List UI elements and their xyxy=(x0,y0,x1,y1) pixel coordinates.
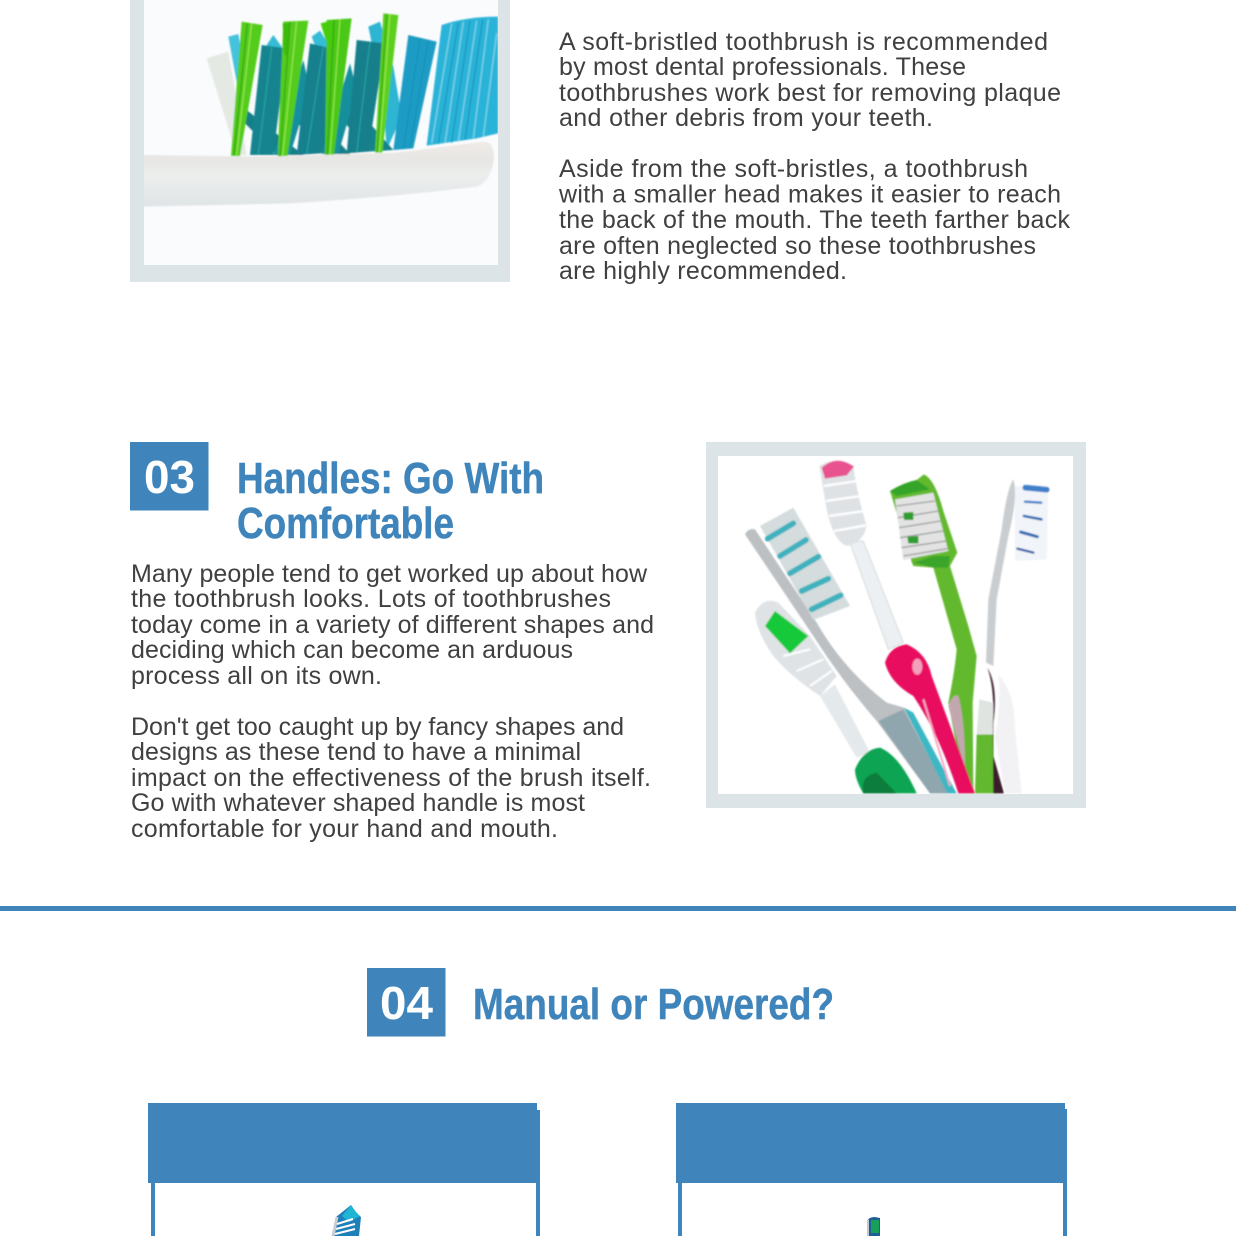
text block: soft bristles and small head: and other debris from your teeth. xyxy=(559,104,933,132)
panel: soft-bristle photo xyxy=(130,0,510,282)
photo frame xyxy=(130,0,510,282)
text block: handles advice: Go with whatever shaped handle is most xyxy=(131,789,585,817)
text block: handles advice: comfortable for your hand and mouth. xyxy=(131,815,558,843)
section divider xyxy=(0,906,1236,911)
photo: toothbrush bristles close-up xyxy=(140,0,498,265)
text block: handles advice: process all on its own. xyxy=(131,662,382,690)
heading: Manual or Powered?: Manual or Powered? xyxy=(473,980,834,1029)
text block: soft bristles and small head: with a smaller head makes it easier to reach xyxy=(558,180,1061,208)
panel: toothbrushes in a cup photo xyxy=(706,442,1086,808)
text block: handles advice: deciding which can become an arduous xyxy=(131,636,573,664)
card header band xyxy=(676,1103,1067,1183)
photo frame xyxy=(706,442,1086,808)
text block: handles advice: the toothbrush looks. Lots of toothbrushes xyxy=(131,585,611,613)
text block: soft bristles and small head: toothbrushes work best for removing plaque xyxy=(559,79,1061,107)
text block: handles advice: impact on the effectiveness of the brush itself. xyxy=(131,764,651,792)
card: manual toothbrush xyxy=(148,1103,540,1236)
text block: soft bristles and small head: are highly recommended. xyxy=(559,257,847,285)
section 03 number badge xyxy=(130,442,208,510)
text block: handles advice: designs as these tend to have a minimal xyxy=(131,738,581,766)
text block: handles advice: Many people tend to get worked up about how xyxy=(131,560,648,588)
text block: handles advice: today come in a variety of different shapes and xyxy=(131,611,654,639)
text block: soft bristles and small head: Aside from the soft-bristles, a toothbrush xyxy=(559,155,1028,183)
text block: soft bristles and small head: by most dental professionals. These xyxy=(559,53,966,81)
text block: handles advice xyxy=(131,560,654,843)
text block: handles advice: Don't get too caught up by fancy shapes and xyxy=(131,713,624,741)
photo: assorted toothbrushes xyxy=(718,456,1073,794)
section 03 number badge: 03 xyxy=(144,451,195,503)
heading: Handles: Go With Comfortable: Handles: Go With xyxy=(237,454,544,503)
text block: soft bristles and small head: the back of the mouth. The teeth farther back xyxy=(559,206,1070,234)
section 04 number badge: 04 xyxy=(380,977,433,1029)
icon: manual toothbrush head xyxy=(332,1205,361,1236)
text block: soft bristles and small head xyxy=(558,28,1070,285)
card side borders xyxy=(678,1183,1067,1236)
text block: soft bristles and small head: are often neglected so these toothbrushes xyxy=(559,232,1036,260)
card side borders xyxy=(151,1183,540,1236)
card: powered toothbrush xyxy=(676,1103,1067,1236)
heading: Handles: Go With Comfortable xyxy=(237,454,544,548)
card header band xyxy=(148,1103,540,1183)
icon: powered toothbrush head xyxy=(867,1217,880,1236)
text block: soft bristles and small head: A soft-bristled toothbrush is recommended xyxy=(559,28,1048,56)
heading: Handles: Go With Comfortable: Comfortable xyxy=(237,499,454,548)
section 04 number badge xyxy=(367,968,446,1036)
